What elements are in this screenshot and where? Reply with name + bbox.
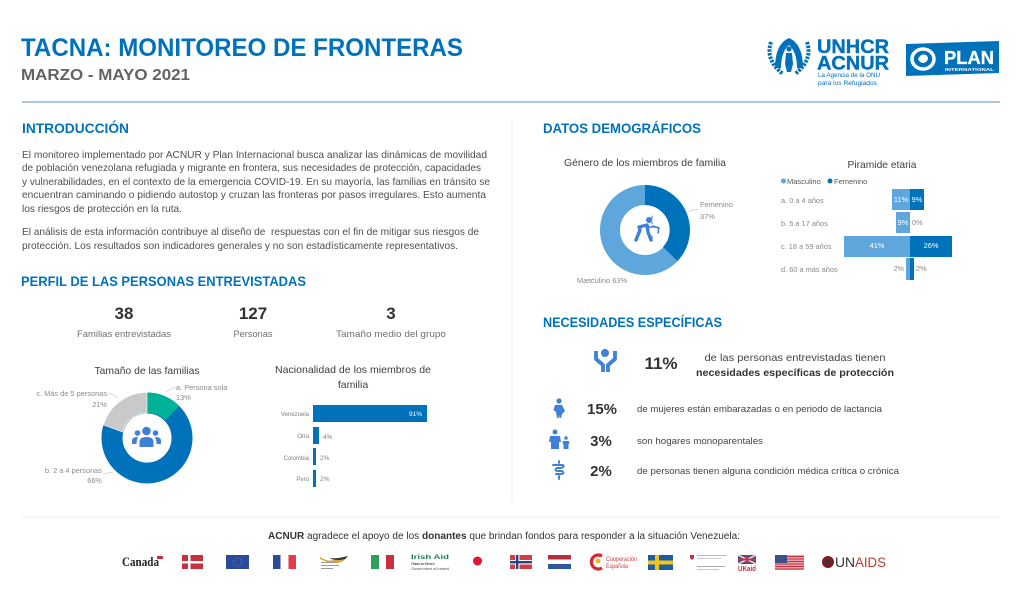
text block: introducción: El análisis de esta información contribuye al diseño de respuestas con el fin de mitigar sus riesgos de [22,227,479,238]
icon: mother and child [549,430,570,449]
logo: UKaid: UKaid [738,566,756,573]
chart: género: Femenino [700,200,733,209]
flag: Italy [371,555,394,569]
chart: pirámide etaria: 0% [912,218,923,227]
text block: introducción: El monitoreo implementado por ACNUR y Plan Internacional busca analizar las dinámicas de movilidad [22,150,487,161]
heading: necesidades específicas: NECESIDADES ESPECÍFICAS [543,314,722,330]
flag: Norway [510,555,532,569]
chart: tamaño de las familias: 66% [87,476,102,485]
icon: protecting hands [596,349,615,372]
chart: tamaño de las familias: 21% [92,400,107,409]
subtitle: MARZO - MAYO 2021 [21,67,190,84]
stat: personas: 127 [239,304,267,323]
icon: pregnant woman [554,398,565,418]
chart: nacionalidad: familia [338,379,368,391]
stat: condición médica: 2% [590,463,612,480]
chart: tamaño de las familias: 13% [176,393,191,402]
stat: tamaño medio [336,304,446,340]
chart: pirámide etaria: c. 18 a 59 años [781,242,832,251]
stat: familias entrevistadas: Familias entrevistadas [77,329,171,340]
chart: género: Masculino 63% [577,276,628,285]
chart: pirámide etaria: 26% [924,241,939,250]
logo: UNHCR ACNUR: para los Refugiados [818,80,877,87]
chart: pirámide etaria: 2% [893,264,904,273]
logo: Irish Aid: Rialtas na hÉireann [411,561,435,566]
chart: género [564,157,733,285]
chart: nacionalidad: 2% [320,476,330,483]
stat: personas [234,304,273,340]
chart: pirámide etaria: b. 5 a 17 años [781,219,828,228]
title: TACNA: MONITOREO DE FRONTERAS [21,34,463,62]
stat: tamaño medio: Tamaño medio del grupo [336,329,446,340]
flag: Japan [473,556,482,566]
chart: pirámide etaria: Masculino [787,177,821,186]
heading: perfil: PERFIL DE LAS PERSONAS ENTREVISTADAS [21,273,306,289]
chart: nacionalidad: Nacionalidad de los miembros de [275,364,431,376]
donor logos [122,554,886,573]
icon: group of people [132,427,161,447]
heading: introducción: INTRODUCCIÓN [22,119,129,136]
logo: Irish Aid [411,554,449,571]
chart: pirámide etaria [781,159,952,280]
chart: nacionalidad: 4% [323,434,333,441]
logo: UNAIDS [822,554,886,570]
logo: Plan International: PLAN [944,48,994,68]
flag: Sweden [648,555,673,570]
stat: embarazadas [554,398,883,418]
logo: UNHCR ACNUR: UNHCR [817,36,889,58]
flag: United States [775,555,804,570]
callout: 11% necesidades de protección [596,349,894,379]
chart: pirámide etaria: Piramide etaria [848,159,917,171]
stat: monoparentales: 3% [590,433,612,450]
logo: UNAIDS: AIDS [855,554,886,570]
chart: pirámide etaria: Femenino [834,177,867,186]
stat: condición médica: de personas tienen alguna condición médica crítica o crónica [637,466,900,477]
logo: UNHCR ACNUR [770,36,889,87]
text block: introducción: de población venezolana refugiada y migrante en frontera, sus necesidades de protección, capacidades [22,163,481,174]
icon: UNHCR wreath and shelter [770,38,808,74]
logo: Plan International [906,41,999,76]
logo: Cooperación Española: Cooperación [606,557,637,563]
logo: Switzerland [690,555,727,570]
flag: European Union [226,555,249,569]
stat: embarazadas: de mujeres están embarazadas o en periodo de lactancia [637,404,883,415]
chart: pirámide etaria: 9% [898,218,909,227]
flag: Netherlands [548,555,571,569]
logo: UNHCR ACNUR: La Agencia de la ONU [818,72,880,79]
chart: tamaño de las familias [36,365,228,485]
chart: pirámide etaria: a. 0 a 4 años [781,196,824,205]
chart: género: Género de los miembros de familia [564,157,726,169]
stat: embarazadas: 15% [587,401,617,418]
chart: nacionalidad: Perú [296,477,309,483]
chart: tamaño de las familias: c. Más de 5 personas [36,389,107,398]
text block: introducción: protección. Los resultados son indicadores generales y no son estadísticamente representativos. [22,241,458,252]
chart: tamaño de las familias: b. 2 a 4 personas [45,466,102,475]
chart: nacionalidad: 91% [409,411,422,418]
stat: familias entrevistadas: 38 [115,304,133,323]
heading: datos demográficos: DATOS DEMOGRÁFICOS [543,120,701,136]
logo: Plan International: INTERNATIONAL [945,67,994,72]
chart: género: 37% [700,212,715,221]
stat: familias entrevistadas [77,304,171,340]
text block: introducción: encuentran caminando o pidiendo autostop y cruzan las fronteras por pasos irregulares. Esto aumenta [22,190,486,201]
logo: Irish Aid: Irish Aid [411,554,449,561]
logo: Cooperación Española: Española [606,564,629,570]
chart: nacionalidad: Venezuela [281,412,310,418]
chart: nacionalidad: Colombia [284,456,310,462]
logo: Germany [320,556,348,569]
text block: introducción [22,150,490,252]
text block: introducción: y vulnerabilidades, en el contexto de la emergencia COVID-19. En su mayoría, las familias en tránsito se [22,177,490,188]
logo: Irish Aid: Government of Ireland [411,566,449,571]
icon: person and arrow [636,216,659,240]
chart: pirámide etaria: 9% [912,195,923,204]
callout: 11% necesidades de protección: 11% [644,354,678,373]
stat: monoparentales [549,430,763,450]
chart: tamaño de las familias: a. Persona sola [176,383,228,392]
flag: Denmark [182,555,203,569]
logo: UKaid [738,555,756,573]
stat: monoparentales: son hogares monoparentales [637,436,763,447]
logo: UNAIDS: UN [835,554,855,570]
chart: nacionalidad: 2% [320,455,330,462]
stat: condición médica [553,461,900,480]
logo: UNHCR ACNUR: ACNUR [817,52,889,74]
chart: nacionalidad [275,364,431,487]
logo: Cooperación Española [591,555,637,570]
stat: personas: Personas [234,329,273,340]
chart: nacionalidad: Otra [297,434,310,440]
flag: France [273,555,296,569]
chart: pirámide etaria: 41% [870,241,885,250]
stat: tamaño medio: 3 [386,304,396,323]
chart: pirámide etaria: 2% [916,264,927,273]
callout: 11% necesidades de protección: necesidades específicas de protección [696,367,894,379]
callout: 11% necesidades de protección: de las personas entrevistadas tienen [704,352,886,364]
chart: pirámide etaria: 11% [894,195,909,204]
chart: tamaño de las familias: Tamaño de las familias [94,365,200,377]
footer: agradecimiento: ACNUR agradece el apoyo de los donantes que brindan fondos para responder a la situación Venezuela: [268,531,740,542]
chart: pirámide etaria: d. 60 a más años [781,265,838,274]
text block: introducción: los riesgos de protección en la ruta. [22,204,182,215]
icon: medical staff symbol [553,461,564,479]
logo: Canada: Canada [122,554,159,569]
